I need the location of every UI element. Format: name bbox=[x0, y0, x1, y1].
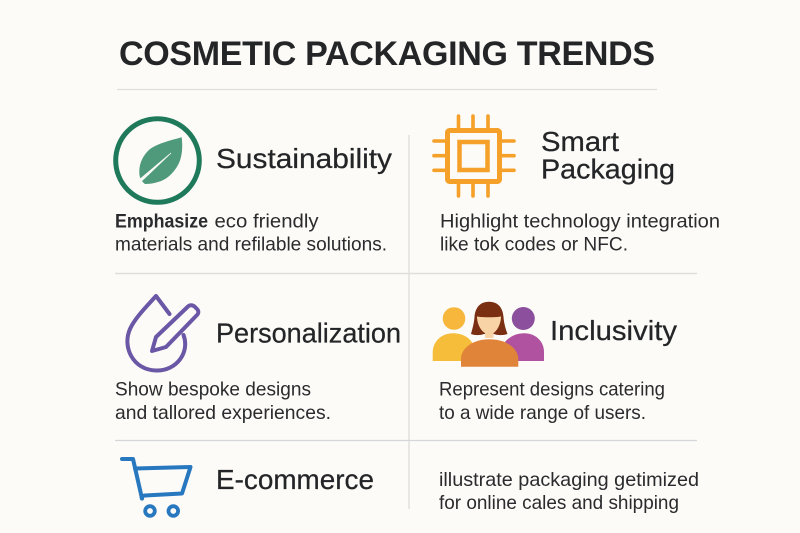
icon: leaf in circle bbox=[116, 119, 199, 202]
heading: Sustainability: Sustainability bbox=[216, 143, 392, 174]
icon: shopping cart bbox=[122, 459, 190, 516]
panel: personalization bbox=[115, 296, 401, 424]
text: Sustainability description: materials and refilable solutions. bbox=[115, 234, 387, 256]
panel: sustainability bbox=[115, 119, 392, 256]
title: COSMETIC PACKAGING TRENDS bbox=[119, 35, 655, 73]
text: Personalization description bbox=[115, 378, 331, 424]
icon: drop and pencil bbox=[127, 296, 198, 371]
text: E-commerce description: for online cales and shipping bbox=[439, 492, 679, 514]
text: Sustainability description: Emphasize bbox=[115, 210, 208, 232]
text: Personalization description: Show bespoke designs bbox=[115, 378, 311, 400]
panel: smart packaging bbox=[434, 116, 720, 256]
icon: microchip bbox=[434, 116, 514, 196]
panel: inclusivity bbox=[433, 302, 677, 424]
text: Sustainability description: eco friendly bbox=[214, 210, 319, 232]
text: Personalization description: and tallored experiences. bbox=[115, 402, 331, 424]
text: Sustainability description bbox=[115, 210, 387, 256]
panel: e-commerce bbox=[122, 459, 699, 516]
heading: Personalization: Personalization bbox=[216, 318, 401, 348]
heading: Smart Packaging bbox=[541, 126, 675, 184]
icon: three people bbox=[433, 302, 544, 367]
text: Inclusivity description: to a wide range of users. bbox=[439, 402, 646, 424]
heading: Inclusivity: Inclusivity bbox=[550, 315, 677, 346]
text: Smart Packaging description: Highlight technology integration bbox=[440, 210, 720, 232]
heading: Smart Packaging: Smart bbox=[541, 126, 619, 157]
text: E-commerce description bbox=[439, 469, 699, 514]
text: Inclusivity description bbox=[439, 378, 665, 424]
text: Smart Packaging description: like tok codes or NFC. bbox=[440, 234, 628, 256]
text: E-commerce description: illustrate packaging getimized bbox=[439, 469, 699, 491]
heading: Smart Packaging: Packaging bbox=[541, 154, 675, 184]
text: Inclusivity description: Represent designs catering bbox=[439, 378, 665, 400]
heading: E-commerce: E-commerce bbox=[216, 464, 374, 495]
text: Smart Packaging description bbox=[440, 210, 720, 256]
